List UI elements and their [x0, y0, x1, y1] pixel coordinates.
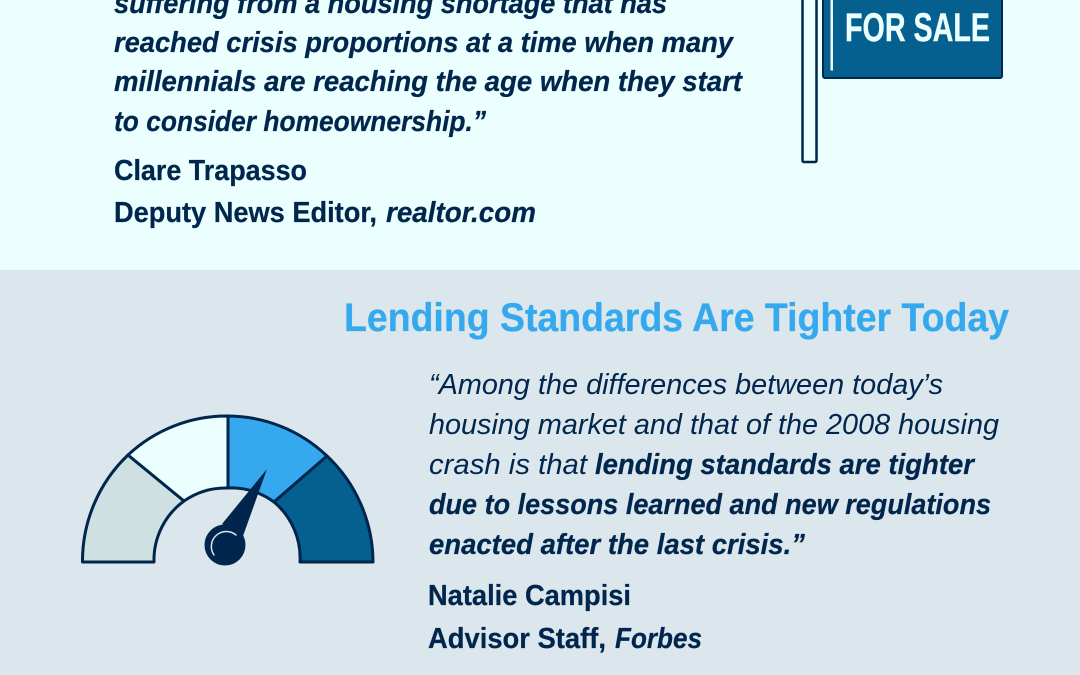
- quote: lending standards: due to lessons learned and new regulations: [429, 489, 991, 521]
- gauge needle: [222, 469, 267, 536]
- panel: housing shortage: [0, 0, 1080, 270]
- sign post: [802, 0, 816, 162]
- quote: lending standards: [429, 369, 999, 561]
- attribution: Clare Trapasso: Deputy News Editor,: [114, 197, 377, 229]
- icon: gauge: [82, 416, 373, 566]
- heading: Lending Standards Are Tighter Today: [344, 296, 1010, 340]
- quote: lending standards: enacted after the last crisis.”: [429, 529, 806, 561]
- attribution: Natalie Campisi: Forbes: [615, 623, 702, 655]
- attribution: Clare Trapasso: Clare Trapasso: [114, 155, 307, 187]
- icon: for sale sign: [802, 0, 1002, 162]
- attribution: Natalie Campisi: Natalie Campisi: [428, 580, 631, 612]
- quote: lending standards: “Among the differences between today’s: [429, 369, 943, 401]
- sign label: FOR SALE: [845, 6, 990, 50]
- quote: lending standards: lending standards are tighter: [595, 449, 976, 481]
- gauge segment: pale: [128, 416, 228, 501]
- quote: lending standards: crash is that: [429, 449, 588, 481]
- attribution: Natalie Campisi: [428, 580, 702, 655]
- gauge segment: grey: [82, 455, 184, 562]
- gauge segment: light blue: [228, 416, 327, 502]
- quote: housing shortage: millennials are reaching the age when they start: [114, 66, 743, 98]
- attribution: Natalie Campisi: Advisor Staff,: [428, 623, 606, 655]
- panel: lending standards: [0, 270, 1080, 675]
- attribution: Clare Trapasso: [114, 155, 536, 229]
- quote: housing shortage: to consider homeownership.”: [114, 106, 487, 138]
- sign board: [823, 0, 1002, 78]
- attribution: Clare Trapasso: realtor.com: [386, 197, 536, 229]
- quote: housing shortage: [114, 0, 743, 138]
- quote: housing shortage: reached crisis proportions at a time when many: [114, 27, 735, 59]
- gauge segment: dark blue: [274, 456, 373, 562]
- quote: lending standards: housing market and that of the 2008 housing: [429, 409, 999, 441]
